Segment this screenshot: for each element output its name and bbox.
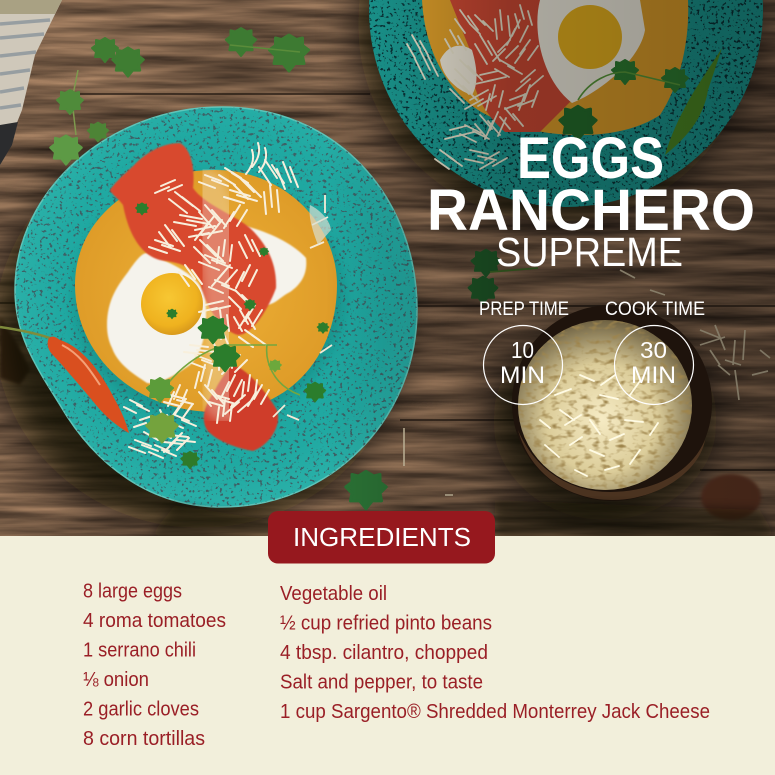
title [427,126,755,275]
ingredients list: column one [83,580,226,750]
ingredients list: column one: 8 large eggs [83,580,182,602]
ingredients list: column one: 1 serrano chili [83,640,196,662]
prep time block [479,299,569,404]
cheese haze [205,190,227,400]
title line: ranchero: RANCHERO [427,178,755,243]
prep time circle [484,326,562,404]
ingredients list: column one: 2 garlic cloves [83,698,199,720]
title line: eggs: EGGS [517,126,664,191]
egg yolk [141,273,203,335]
title line: supreme: SUPREME [496,229,683,275]
ingredients list: column two: 4 tbsp. cilantro, chopped [280,642,488,664]
cilantro on table [50,28,538,509]
right-side darkening [352,0,775,536]
shadows: plates and bowl [0,0,754,528]
cook time circle [614,326,694,404]
ingredients list: column two: ½ cup refried pinto beans [280,612,492,634]
tortilla [75,170,337,412]
ingredients heading badge: INGREDIENTS [293,522,471,552]
cook time label: COOK TIME [605,299,705,320]
cook time unit: MIN [631,362,676,389]
cheese bits at the plate edge [273,195,332,420]
ingredients list: column two: 1 cup Sargento® Shredded Monterrey Jack Cheese [280,701,710,723]
egg whites [107,226,306,383]
spice pile [701,474,761,520]
bowl of cheese [512,305,712,501]
cook time block [605,299,705,404]
wood table [0,0,775,536]
bottom table shadow [150,500,775,536]
scattered cheese on table [404,260,770,495]
food photograph [0,0,775,536]
ingredients heading badge [268,511,495,564]
prep time unit: MIN [500,362,545,389]
ingredients list: column one: ⅛ onion [83,669,149,691]
shredded cheese [124,143,298,458]
ingredients list: column two: Salt and pepper, to taste [280,672,483,694]
ingredients list: column two [280,583,710,723]
prep time label: PREP TIME [479,299,569,320]
main plate [10,100,425,515]
salsa bottom [204,365,278,451]
ingredients list: column two: Vegetable oil [280,583,387,605]
salsa top [110,143,276,335]
cook time value: 30 [640,337,667,363]
top plate [360,0,775,215]
striped blanket [0,0,62,165]
cilantro on plate [135,202,330,468]
prep time value: 10 [511,337,534,363]
chili pepper [0,327,129,433]
ingredients list: column one: 4 roma tomatoes [83,610,226,632]
ingredients list: column one: 8 corn tortillas [83,728,205,750]
